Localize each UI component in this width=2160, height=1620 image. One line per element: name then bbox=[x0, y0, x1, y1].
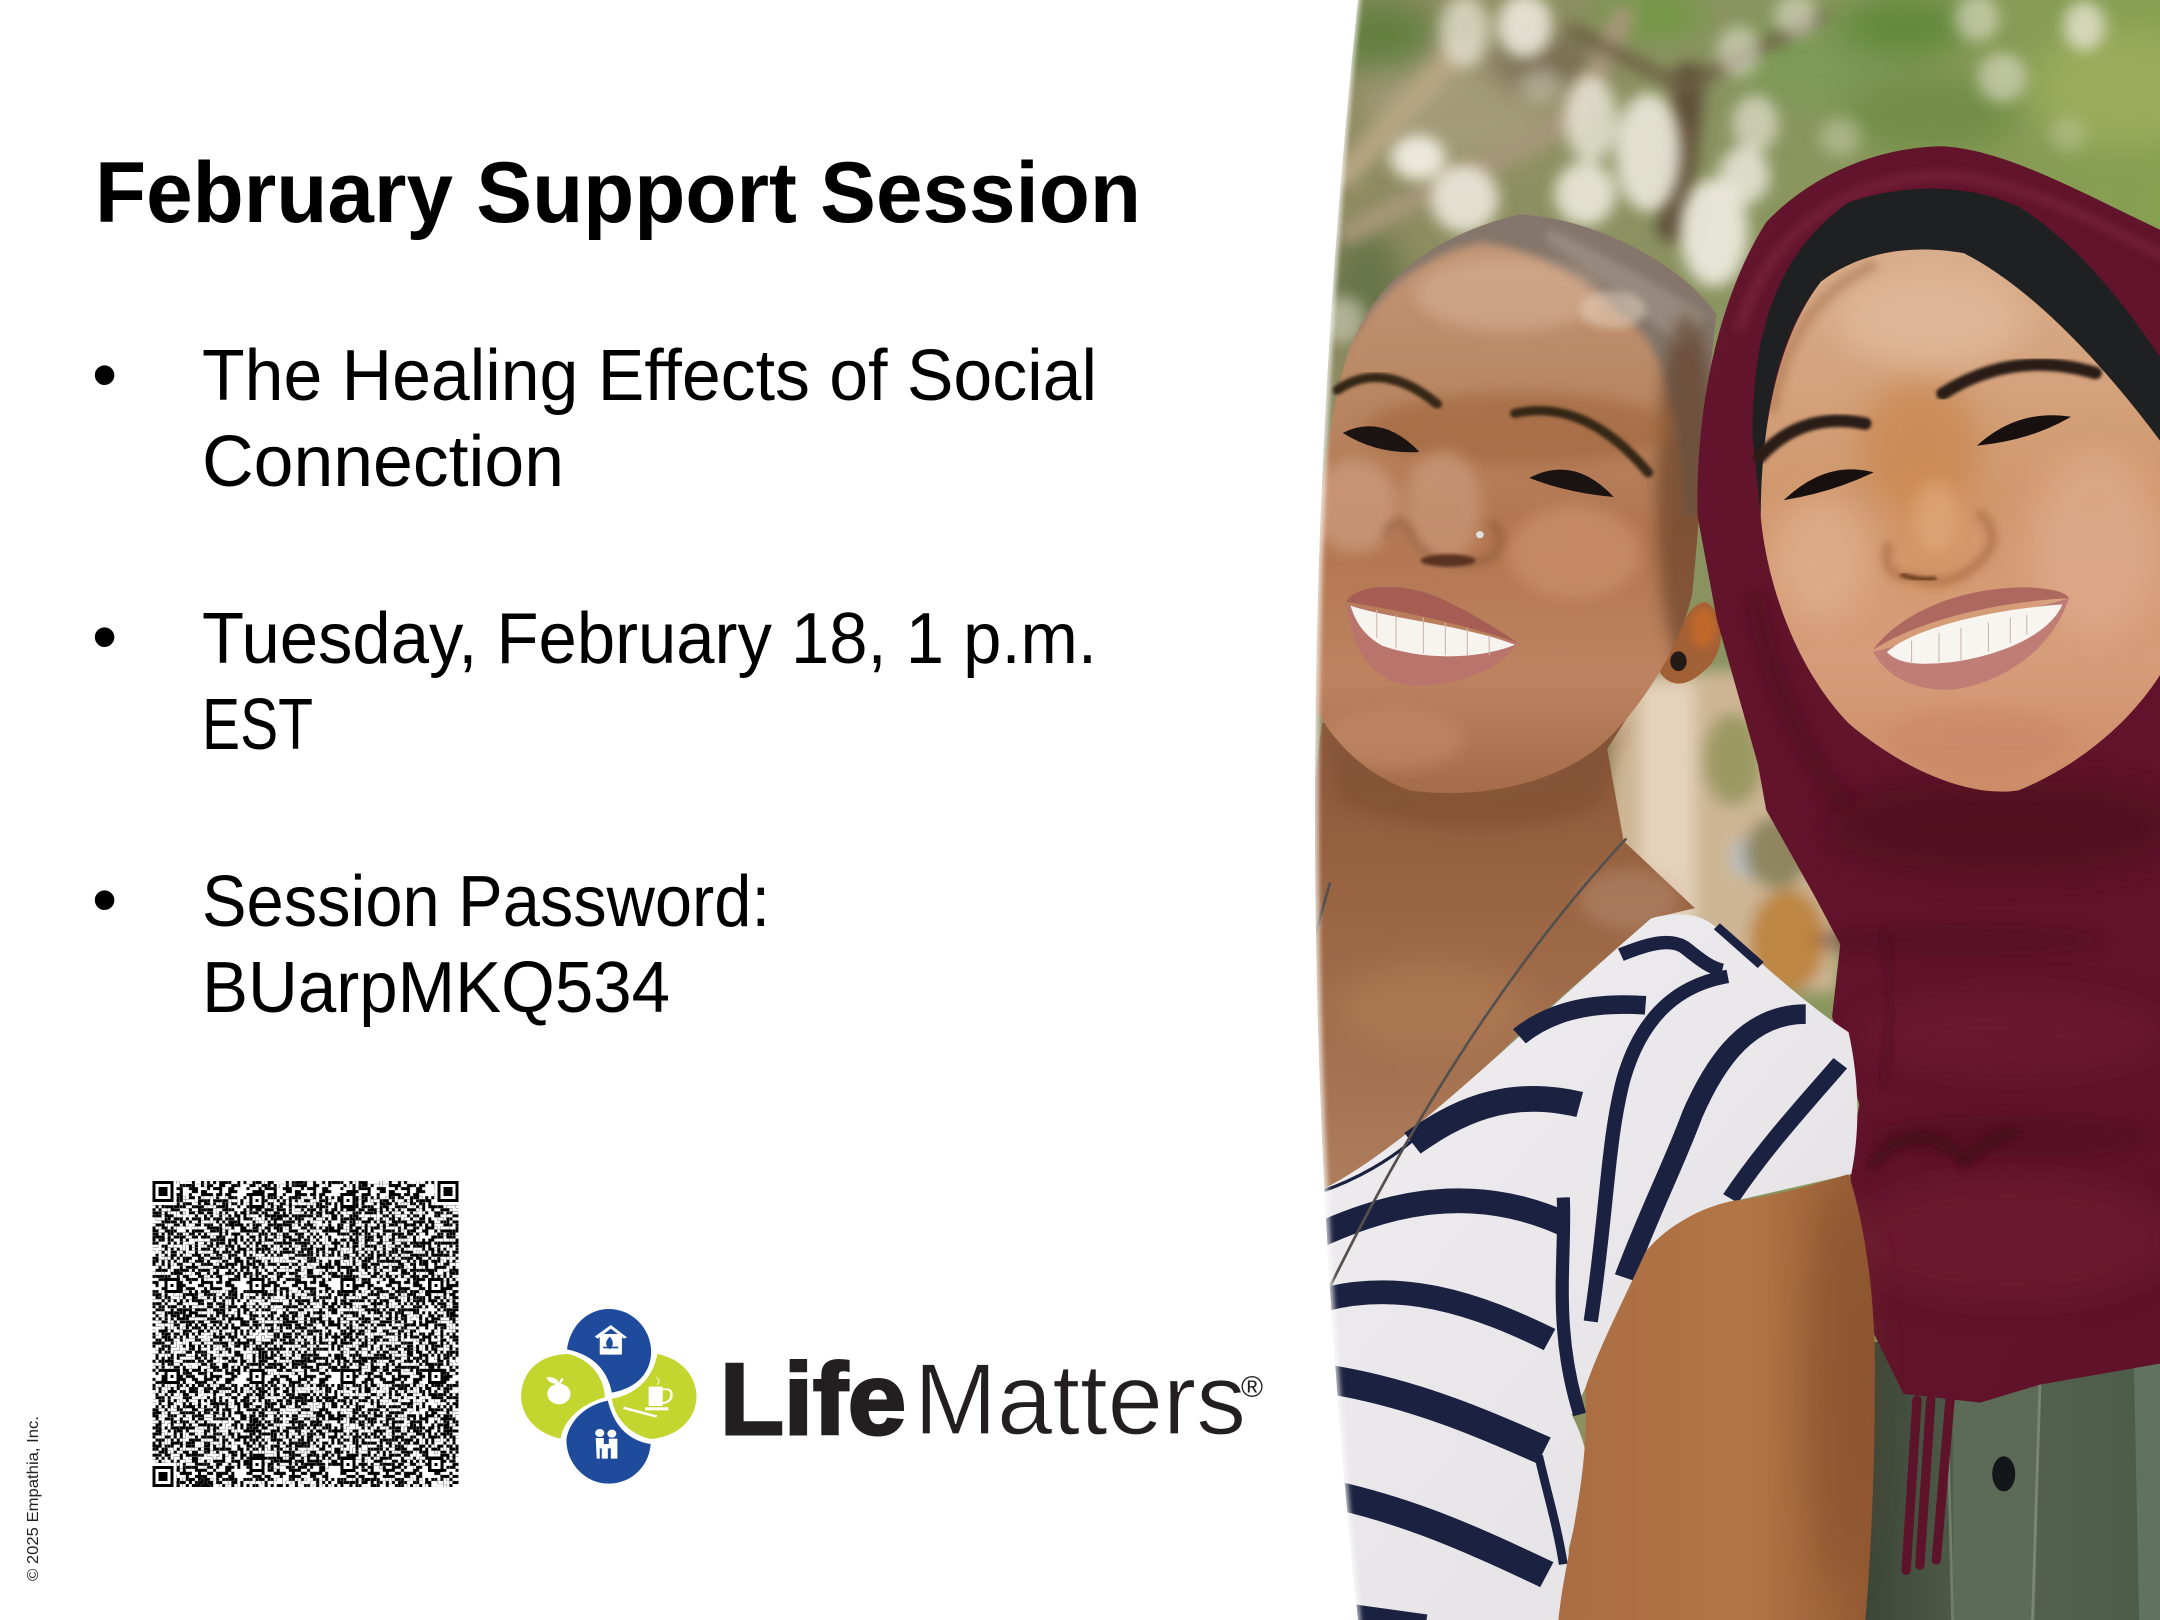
icon: house with plant bbox=[595, 1325, 627, 1355]
icon: apple bbox=[546, 1377, 571, 1404]
title: February Support Session bbox=[95, 145, 1141, 241]
icon: four-petal logo mark bbox=[521, 1309, 696, 1484]
logo wordmark bbox=[720, 1344, 1263, 1456]
copyright: © 2025 Empathia, Inc. bbox=[25, 1416, 42, 1581]
jacket bbox=[1859, 1322, 2160, 1620]
photo: two smiling women bbox=[1267, 0, 2160, 1620]
woman left: arm bbox=[1558, 1174, 1875, 1620]
woman left: striped shirt bbox=[1267, 914, 1857, 1620]
bullet: session password: BUarpMKQ534 bbox=[202, 948, 670, 1028]
logo wordmark: Matters bbox=[914, 1344, 1246, 1456]
bullet: session topic: The Healing Effects of Social bbox=[202, 336, 1097, 416]
eyes bbox=[1787, 416, 2068, 499]
bullet list bbox=[92, 335, 1097, 1028]
shirt stripes bbox=[1311, 926, 1840, 1620]
bullet: date and time: Tuesday, February 18, 1 p.m. bbox=[202, 599, 1097, 679]
bullet: date and time: EST bbox=[202, 685, 313, 765]
eyes bbox=[1343, 426, 1614, 497]
bullet: session password bbox=[92, 860, 770, 1028]
ear with earring bbox=[1657, 602, 1721, 684]
bullet: session password: Session Password: bbox=[202, 862, 770, 942]
logo wordmark: Life bbox=[720, 1344, 906, 1456]
woman left: head bbox=[1311, 196, 1739, 1190]
scarf folds bbox=[1739, 176, 2160, 1302]
eyebrows bbox=[1760, 364, 2095, 457]
icon: mug and pencil bbox=[623, 1377, 671, 1418]
photo background: area behind shoulders bbox=[1607, 672, 1838, 992]
jacket button bbox=[1992, 1456, 2015, 1491]
bullet: date and time: • bbox=[92, 597, 117, 677]
logo wordmark: ® bbox=[1241, 1371, 1263, 1404]
bullet: session topic: • bbox=[92, 335, 117, 415]
photo background: blurred foliage bbox=[1289, 0, 2160, 1620]
woman right: face bbox=[1760, 250, 2160, 792]
bullet: session topic bbox=[92, 335, 1097, 502]
smile bbox=[1873, 587, 2069, 690]
icon: family bbox=[595, 1429, 617, 1459]
bullet: date and time bbox=[92, 597, 1097, 765]
smile bbox=[1347, 587, 1518, 686]
bullet: session topic: Connection bbox=[202, 422, 564, 502]
necklace bbox=[1315, 838, 1626, 1286]
QR code bbox=[152, 1181, 459, 1487]
bullet: session password: • bbox=[92, 860, 117, 940]
woman right: headscarf bbox=[1697, 146, 2160, 1403]
scarf fringe bbox=[1906, 1400, 1950, 1570]
soft photo edge bbox=[1315, 0, 1358, 1620]
LifeMatters logo bbox=[521, 1309, 1263, 1484]
nose bbox=[1385, 522, 1500, 567]
eyebrows bbox=[1337, 377, 1648, 473]
black under-scarf bbox=[1753, 189, 2160, 517]
nose bbox=[1887, 480, 1992, 582]
